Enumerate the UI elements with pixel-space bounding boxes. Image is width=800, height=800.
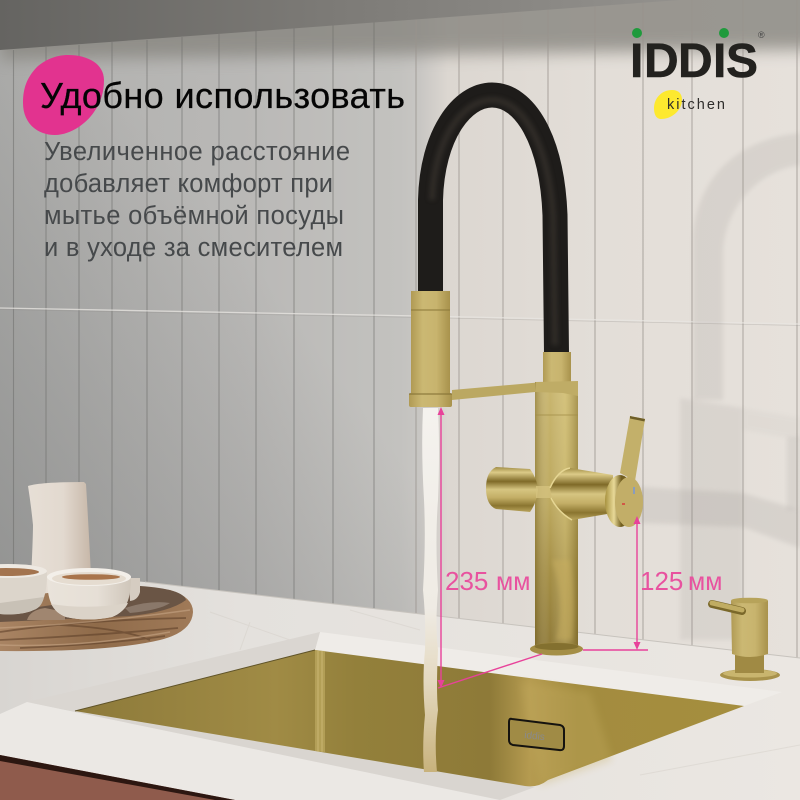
body text: добавляет комфорт при bbox=[44, 170, 333, 198]
pull-down head sleeve bbox=[409, 291, 452, 407]
sink back rim bbox=[315, 632, 782, 706]
logo: IDDIS kitchen: ® bbox=[758, 30, 765, 40]
tableware on tray bbox=[0, 482, 193, 651]
arrow: 235 mm bbox=[438, 407, 542, 688]
faucet bbox=[409, 95, 645, 656]
base ring bbox=[530, 642, 583, 656]
faucet shadow on wall bbox=[640, 133, 800, 640]
label: 125 mm: 125 bbox=[640, 566, 683, 596]
front bowl bbox=[47, 568, 131, 620]
counter front edge and cabinet bbox=[0, 755, 235, 800]
yellow blob bbox=[654, 90, 682, 119]
body text: и в уходе за смесителем bbox=[44, 234, 343, 262]
main column bbox=[535, 382, 578, 650]
sink bbox=[0, 632, 782, 800]
sink basin bbox=[75, 650, 744, 786]
holder arm bbox=[452, 382, 563, 400]
handle cap bbox=[605, 475, 643, 527]
label: 235 mm: 235 bbox=[445, 566, 488, 596]
soap dispenser bbox=[712, 598, 780, 681]
ceiling shadow band bbox=[0, 0, 680, 50]
label: 235 mm: мм bbox=[496, 568, 530, 596]
arrow: 125 mm bbox=[583, 516, 648, 650]
overflow plate bbox=[509, 719, 564, 750]
black flexible hose bbox=[430, 95, 556, 354]
label: 125 mm: мм bbox=[688, 568, 722, 596]
body text bbox=[44, 138, 350, 262]
wooden tray bbox=[0, 586, 193, 651]
lever handle bbox=[620, 416, 645, 481]
sink left rim bbox=[27, 632, 320, 711]
column cross highlight bbox=[536, 486, 554, 498]
left cross stub bbox=[486, 467, 538, 512]
heading blob bbox=[23, 55, 104, 135]
body text: мытье объёмной посуды bbox=[44, 202, 344, 230]
left bowl bbox=[0, 564, 47, 614]
upper collar bbox=[543, 352, 571, 382]
dimension arrows bbox=[438, 407, 648, 688]
title: Удобно использовать bbox=[40, 75, 405, 116]
countertop bbox=[0, 570, 800, 800]
pitcher bbox=[28, 482, 92, 612]
small cup behind bbox=[129, 578, 140, 601]
body text: Увеличенное расстояние bbox=[44, 138, 350, 166]
sink front rim bbox=[27, 702, 535, 800]
overflow plate: iddis bbox=[524, 730, 545, 743]
logo: IDDIS kitchen bbox=[630, 28, 765, 119]
counter front strip bbox=[0, 702, 500, 800]
right cross body bbox=[550, 468, 613, 520]
kitchen wordmark: kitchen bbox=[667, 97, 725, 113]
water stream bbox=[422, 408, 439, 772]
logo: IDDIS kitchen: IDDIS bbox=[630, 35, 758, 88]
